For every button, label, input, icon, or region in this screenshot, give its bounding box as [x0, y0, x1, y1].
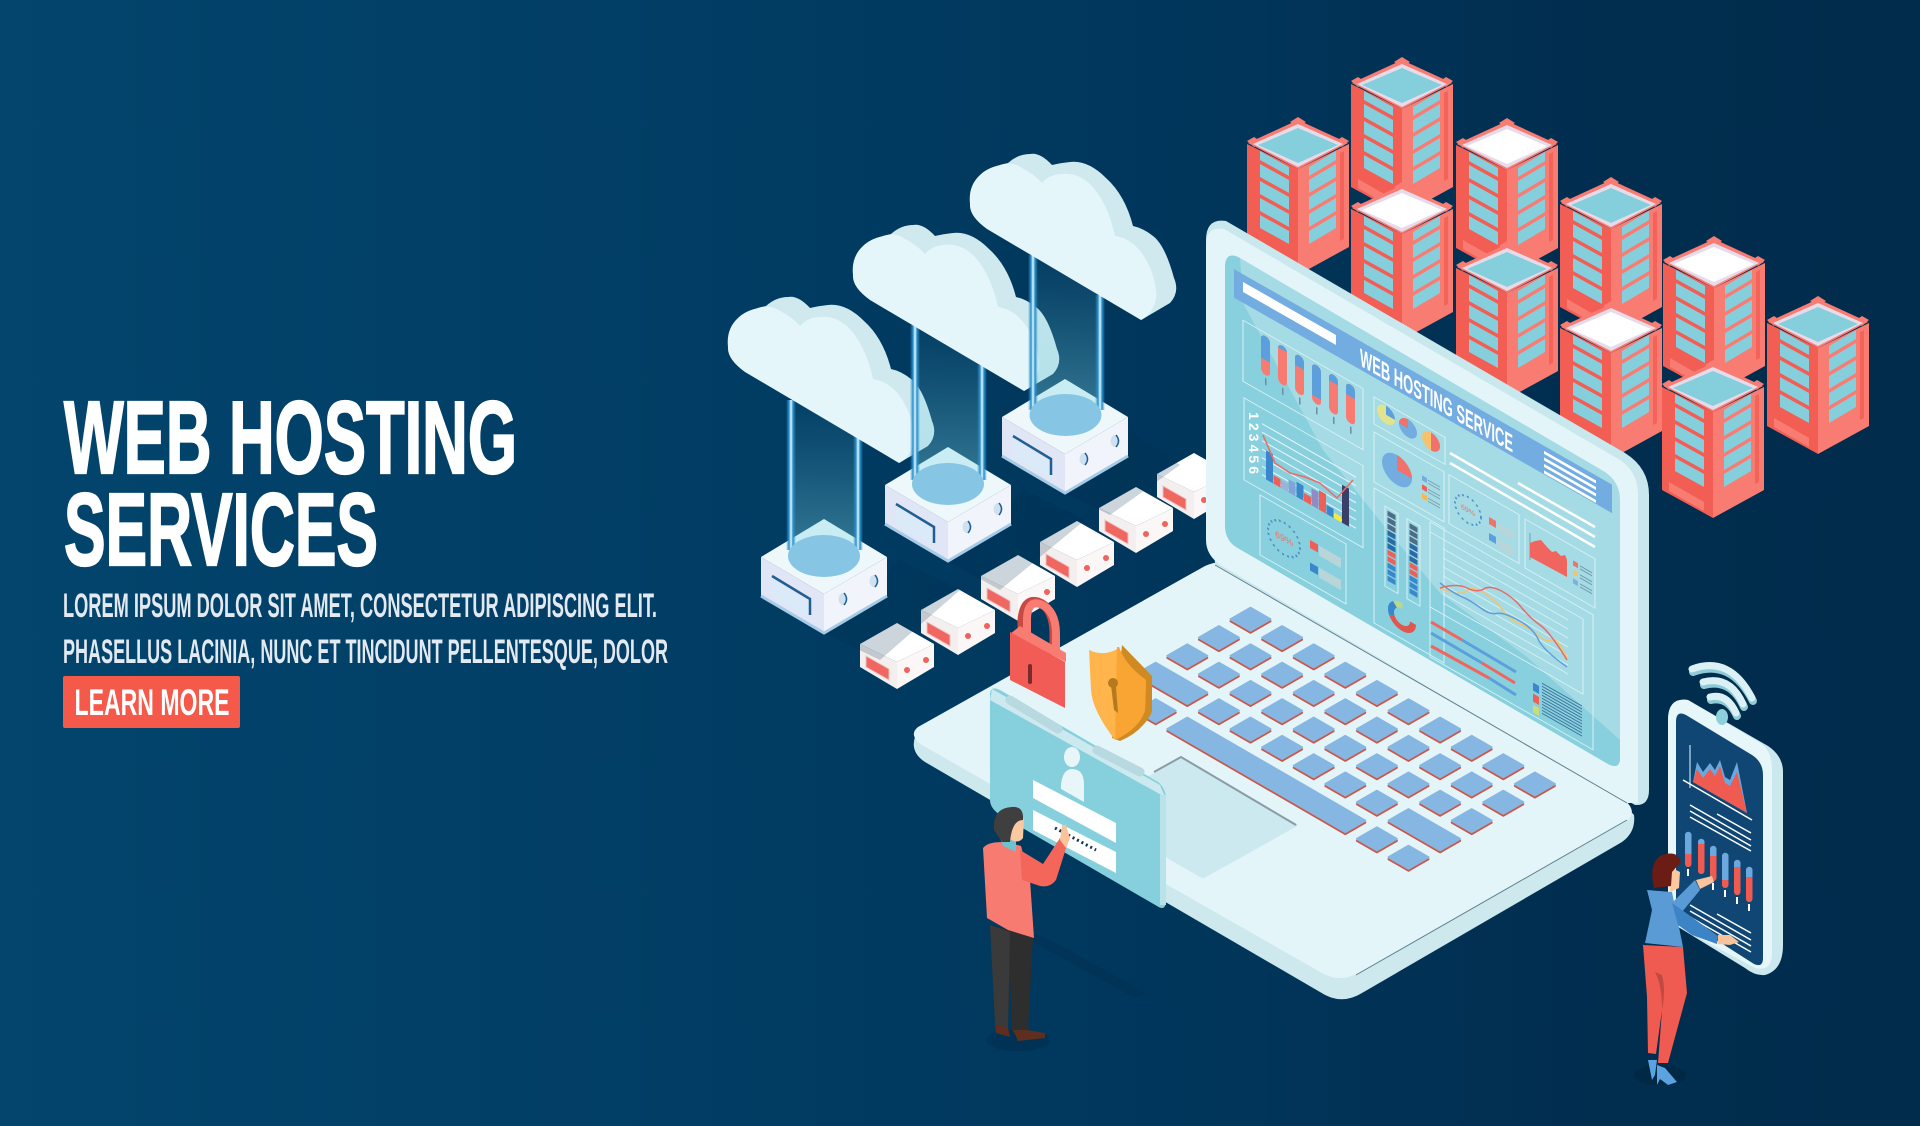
donut gauge right: 69% — [1461, 502, 1475, 519]
keyboard — [1136, 608, 1555, 871]
dashboard display — [1225, 256, 1620, 766]
legend swatches right — [1573, 560, 1592, 594]
donut gauge left — [1268, 514, 1341, 590]
header bar: WEB HOSTING SERVICE — [1360, 343, 1513, 458]
button: learn more: LEARN MORE — [74, 682, 230, 723]
header bar — [1234, 269, 1612, 515]
form fields — [1033, 780, 1116, 873]
laptop screen frame — [1206, 221, 1649, 805]
bar chart — [1262, 423, 1356, 531]
woman at phone — [1634, 854, 1739, 1085]
wifi icon — [1692, 666, 1753, 725]
body text: LOREM IPSUM DOLOR SIT AMET, CONSECTETUR ADIPISCING ELIT. — [63, 587, 657, 625]
phone area chart — [1683, 745, 1752, 820]
dashboard header and panels — [1234, 269, 1612, 761]
password dots — [1055, 828, 1096, 850]
server towers — [1247, 57, 1869, 518]
donut gauge left: 69% — [1275, 529, 1293, 550]
bar chart trend line — [1263, 435, 1353, 498]
body text: PHASELLUS LACINIA, NUNC ET TINCIDUNT PELLENTESQUE, DOLOR — [63, 633, 668, 671]
bottom legend block — [1533, 678, 1582, 740]
heading: web hosting services — [64, 380, 517, 587]
panel outlines — [1243, 320, 1595, 751]
login panel — [990, 688, 1166, 908]
body text — [63, 587, 668, 671]
wave lines — [1440, 583, 1567, 667]
laptop — [914, 221, 1649, 999]
row numbers: 123456 — [1246, 412, 1262, 474]
upper text lines — [1450, 453, 1595, 547]
area chart — [1530, 533, 1567, 577]
heading: web hosting services: SERVICES — [64, 472, 378, 587]
man at login panel — [983, 807, 1147, 1051]
progress lines — [1431, 622, 1516, 695]
button: learn more — [63, 676, 240, 728]
small data boxes — [860, 453, 1231, 689]
trackpad — [1090, 757, 1296, 877]
stacked level bars — [1385, 506, 1420, 606]
heading: web hosting services: WEB HOSTING — [64, 380, 517, 495]
phone pill chart — [1685, 832, 1752, 911]
shield icon — [1089, 645, 1152, 741]
wave chart gridlines — [1443, 548, 1568, 675]
user icon — [1061, 747, 1084, 802]
laptop base — [914, 562, 1634, 999]
three small pies — [1377, 401, 1440, 456]
colour donut — [1391, 600, 1413, 634]
pill chart — [1261, 334, 1355, 436]
phone — [1668, 666, 1783, 975]
big pie — [1382, 446, 1440, 510]
donut gauge right — [1455, 490, 1514, 557]
phone text lines — [1690, 805, 1751, 952]
padlock icon — [1010, 601, 1066, 708]
cloud servers with data beams — [728, 154, 1180, 660]
